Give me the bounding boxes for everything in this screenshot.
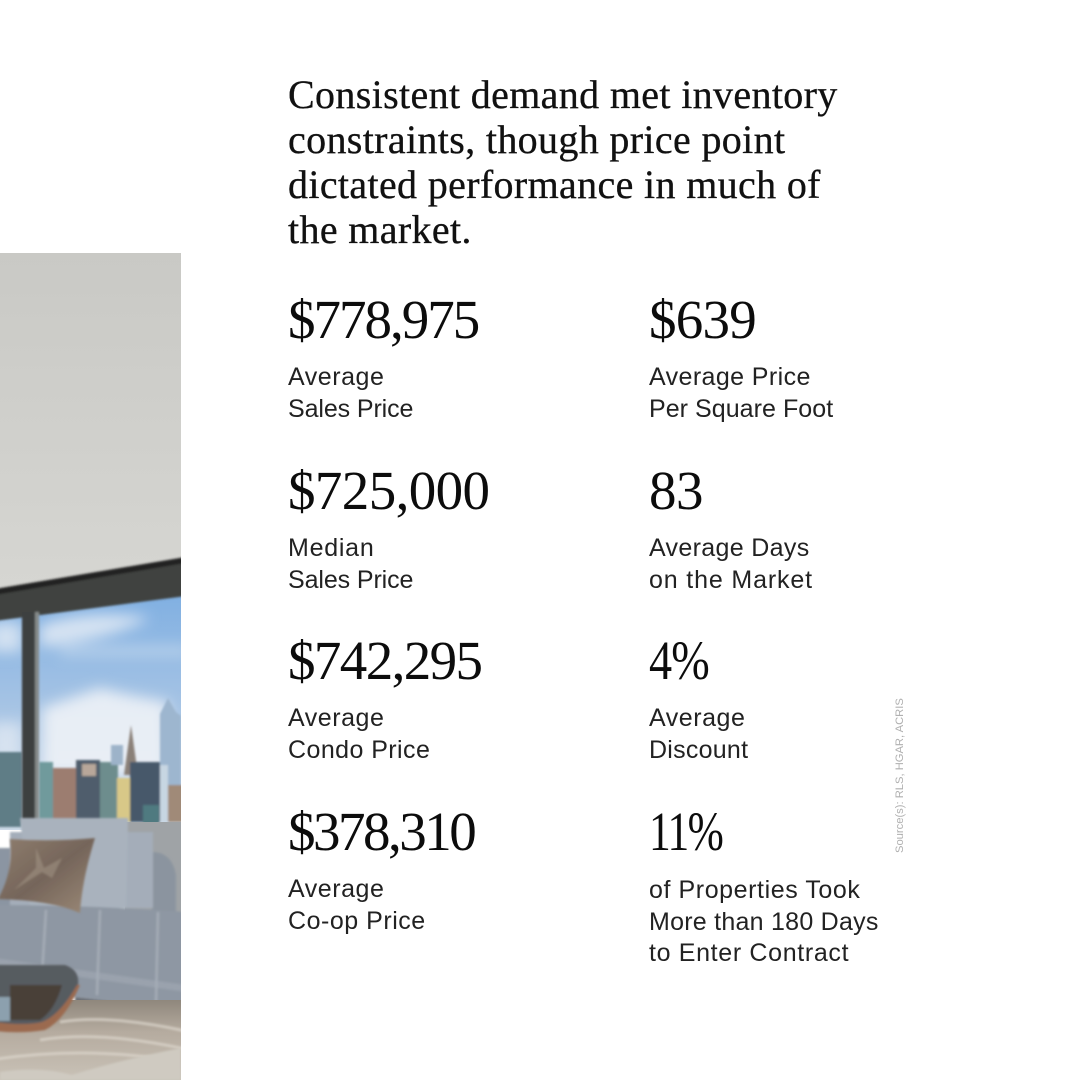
throw pillow (0, 838, 95, 913)
stat: median sales price: Median (288, 534, 374, 562)
heading: the market. (288, 207, 472, 252)
stat: average condo price: Average (288, 704, 384, 732)
sky (0, 590, 181, 830)
stat: average discount: 4% (649, 630, 709, 691)
stat: median sales price: Sales Price (288, 566, 413, 594)
window frame beam (0, 557, 186, 822)
heading: Consistent demand met inventory (288, 72, 838, 117)
sofa (0, 818, 186, 1016)
stat: properties over 180 days: to Enter Contract (649, 939, 849, 967)
clouds (0, 614, 190, 775)
source note: Source(s): RLS, HGAR, ACRIS (894, 698, 906, 853)
stat: average co-op price: $378,310 (288, 801, 474, 862)
heading (288, 72, 838, 252)
wall (0, 253, 181, 593)
stat: average co-op price: Average (288, 875, 384, 903)
stat: average co-op price: Co-op Price (288, 906, 426, 934)
stat: days on market: 83 (649, 460, 703, 521)
skyline (0, 698, 186, 827)
stat: properties over 180 days (649, 801, 879, 967)
stat: average sales price: Average (288, 363, 384, 391)
stat: average sales price: Sales Price (288, 394, 413, 422)
stat: average sales price: $778,975 (288, 289, 478, 350)
stat: average condo price: Condo Price (288, 736, 430, 764)
stat: average co-op price (288, 801, 475, 934)
stat: average condo price (288, 630, 481, 764)
mullion (22, 612, 35, 822)
stat: average discount: Discount (649, 736, 748, 764)
coffee table (0, 965, 80, 1032)
armchair (0, 1048, 181, 1080)
heading: constraints, though price point (288, 117, 785, 162)
stat: properties over 180 days: More than 180 Days (649, 908, 879, 936)
stat: price per square foot: $639 (649, 289, 756, 350)
stat: average discount (649, 630, 748, 764)
stat: days on market (649, 460, 813, 594)
heading: dictated performance in much of (288, 162, 821, 207)
stat: median sales price: $725,000 (288, 460, 489, 521)
stat: average discount: Average (649, 704, 745, 732)
stat: price per square foot: Per Square Foot (649, 394, 833, 422)
photo: living room with skyline view (0, 253, 181, 1080)
stat: price per square foot: Average Price (649, 363, 811, 391)
terrace strip behind sofa (125, 822, 185, 922)
stat: properties over 180 days: of Properties Took (649, 876, 860, 904)
stat: median sales price (288, 460, 489, 594)
stat: price per square foot (649, 289, 833, 422)
stat: average condo price: $742,295 (288, 630, 481, 691)
stat: average sales price (288, 289, 478, 422)
stat: days on market: on the Market (649, 566, 813, 594)
stat: properties over 180 days: 11% (649, 801, 722, 862)
stat: days on market: Average Days (649, 534, 810, 562)
rug (0, 1000, 181, 1080)
